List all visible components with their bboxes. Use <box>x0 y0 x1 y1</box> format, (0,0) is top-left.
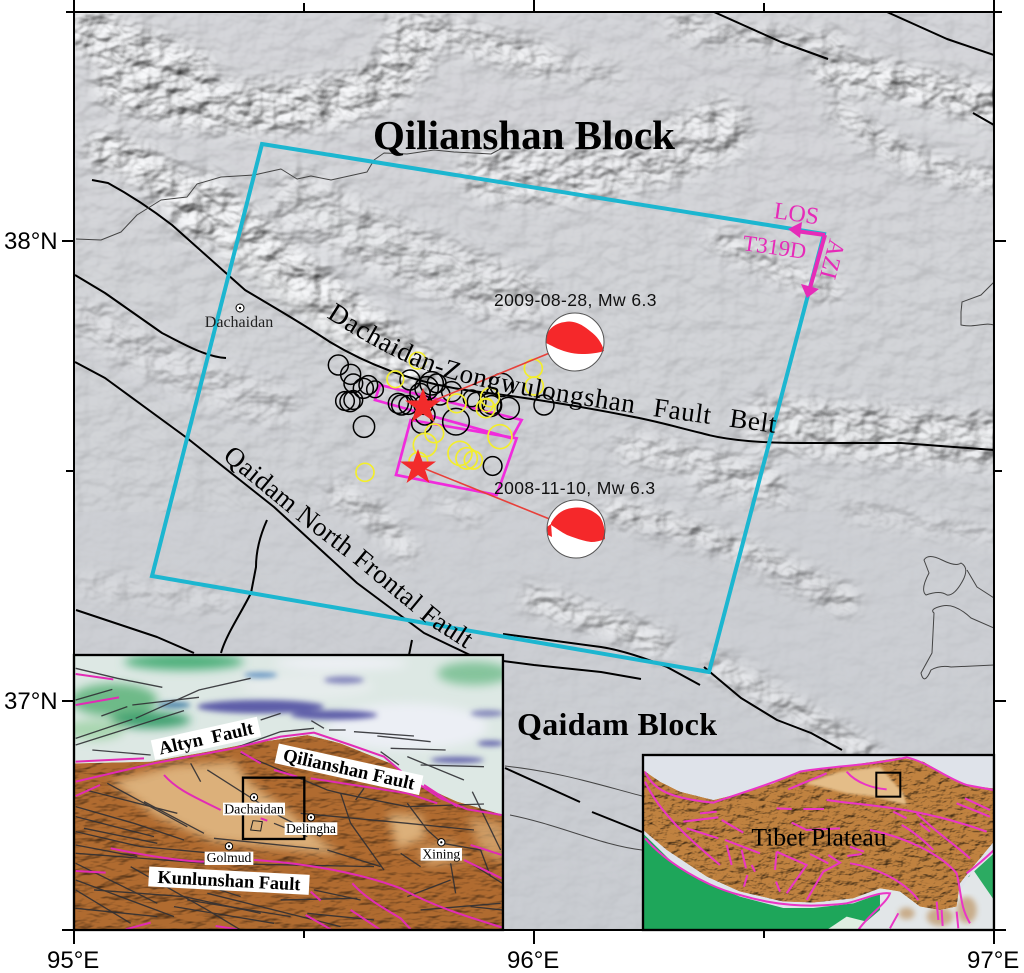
inset frame <box>74 655 503 930</box>
epicentre star 2009 <box>405 388 441 422</box>
study area box <box>243 778 304 839</box>
inset terrain <box>74 735 504 932</box>
focal mechanism 2008 <box>547 500 605 558</box>
soft ridge shading <box>230 35 994 600</box>
InSAR track footprint <box>152 144 824 672</box>
town: Delingha: Delingha <box>286 821 336 836</box>
small fault footprint <box>251 821 262 831</box>
LOS label: LOS <box>772 198 821 230</box>
plateau faults <box>645 757 994 930</box>
tan basin <box>803 767 907 805</box>
leader lines from epicentres to mechanisms <box>418 352 552 520</box>
town: Xining <box>421 839 462 861</box>
yellow aftershock circles <box>356 352 543 481</box>
town: Dachaidan <box>223 794 285 817</box>
inset: Tibet Plateau <box>643 755 994 930</box>
label: 2008 event: 2008-11-10, Mw 6.3 <box>494 478 656 498</box>
plateau study area box <box>876 773 900 797</box>
town: Golmud: Golmud <box>207 850 252 865</box>
town: Xining: Xining <box>422 846 460 861</box>
grey faults in inset <box>76 668 502 930</box>
lowland green <box>643 833 897 930</box>
label: Tibet Plateau: Tibet Plateau <box>751 823 887 852</box>
town: Delingha <box>285 814 337 836</box>
title: Qaidam Block: Qaidam Block <box>517 706 717 742</box>
southeastern snowy margin <box>866 871 993 924</box>
plateau inset background <box>644 756 993 908</box>
fault plane rectangles <box>375 385 522 495</box>
AZI label: AZI <box>814 236 849 282</box>
LOS and azimuth arrows <box>741 198 849 298</box>
magenta faults in inset <box>76 674 502 930</box>
thin river and lake outlines <box>76 147 994 850</box>
T319D label: T319D <box>741 230 808 264</box>
southeastern foothill patches <box>899 897 977 926</box>
inset: regional map <box>64 653 511 932</box>
black aftershock circles <box>328 355 554 475</box>
axis labels <box>4 228 1019 973</box>
label: 2009 event: 2009-08-28, Mw 6.3 <box>494 290 657 310</box>
town: Dachaidan <box>205 304 273 331</box>
axis labels: 38°N <box>4 228 58 255</box>
label: Qilianshan Fault: Qilianshan Fault <box>281 745 417 795</box>
label: Kunlunshan Fault: Kunlunshan Fault <box>157 867 302 894</box>
earthquake sequence and fault planes <box>328 352 554 495</box>
fault label: Qaidam North Frontal Fault: Qaidam North Frontal Fault <box>226 448 472 648</box>
plateau inset frame <box>643 755 994 930</box>
tan basins <box>111 762 504 867</box>
title: Qilianshan Block: Qilianshan Block <box>373 112 675 158</box>
focal mechanism 2009 <box>546 313 604 371</box>
town: Dachaidan: Dachaidan <box>224 802 284 817</box>
fault label: Dachaidan-Zongwulongshan Fault Belt: Dachaidan-Zongwulongshan Fault Belt <box>326 302 776 433</box>
plateau terrain <box>643 757 994 910</box>
black fault lines <box>75 12 994 832</box>
axis labels: 37°N <box>4 688 58 715</box>
epicentre star 2008 <box>400 449 436 483</box>
inset background <box>75 656 502 814</box>
label: Altyn Fault: Altyn Fault <box>157 718 256 759</box>
town: Golmud <box>205 843 253 865</box>
town: Dachaidan: Dachaidan <box>205 314 273 331</box>
